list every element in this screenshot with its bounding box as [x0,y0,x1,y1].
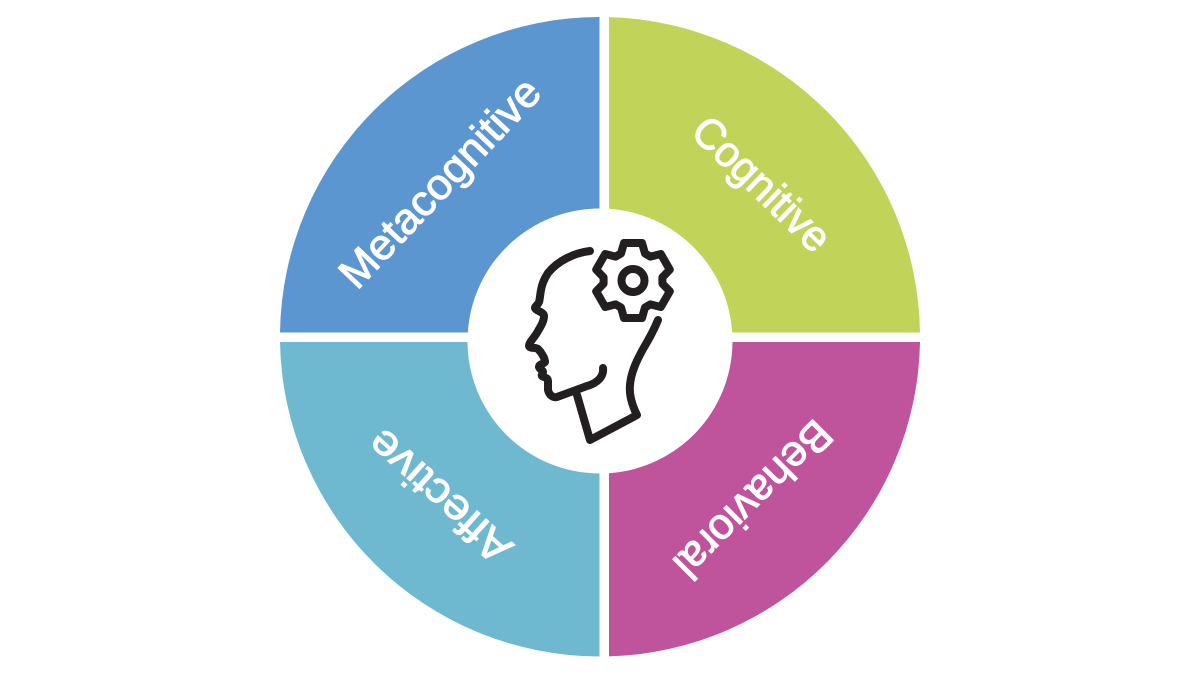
label: Affective: Affective [358,419,522,573]
icon: gear hub [622,269,644,292]
segment: Metacognitive [280,17,600,332]
segment: Cognitive [609,17,920,332]
icon: head profile [529,251,603,397]
label: Cognitive: Cognitive [682,107,841,262]
segment: Behavioral [609,342,920,656]
icon: head with gear [529,243,670,440]
label: Metacognitive: Metacognitive [329,68,551,298]
segment: Affective [280,342,600,656]
icon: neck [577,320,658,440]
label: Behavioral: Behavioral [664,410,842,588]
icon: gear [596,243,670,318]
